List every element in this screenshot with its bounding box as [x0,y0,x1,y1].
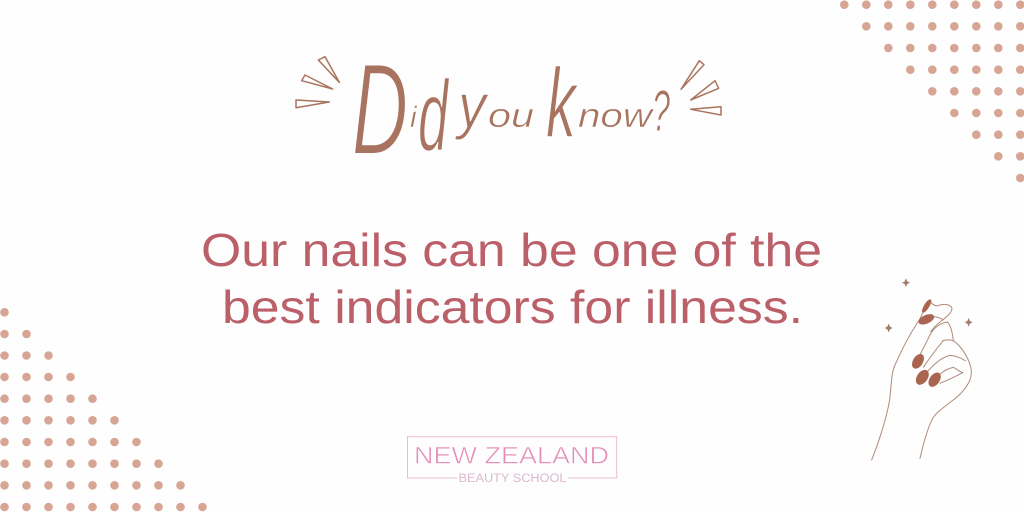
dot pattern: top right [840,0,1024,182]
nails [910,298,943,389]
logo frame [408,437,617,478]
heading: did you know: i [410,101,418,134]
heading: did you know: ou [488,97,534,135]
statement line 1: Our nails can be one of the [201,224,822,276]
heading: did you know: now [578,97,655,135]
icon: hand with painted nails [872,278,973,460]
heading: did you know: D [352,36,408,182]
icon: left burst rays [296,57,339,108]
heading: did you know: ? [652,79,670,144]
logo tagline: BEAUTY SCHOOL [458,473,567,485]
statement line 2: best indicators for illness. [222,281,803,333]
sparkles [885,278,973,332]
heading: did you know: d [418,60,450,172]
logo: new zealand beauty school [408,437,617,485]
main statement [201,224,822,333]
icon: right burst rays [681,61,721,115]
heading: did you know: k [546,48,579,158]
dot pattern: bottom left [0,308,207,511]
logo name: NEW ZEALAND [414,442,609,470]
hand outline [872,301,971,460]
heading: did you know: y [454,72,490,141]
